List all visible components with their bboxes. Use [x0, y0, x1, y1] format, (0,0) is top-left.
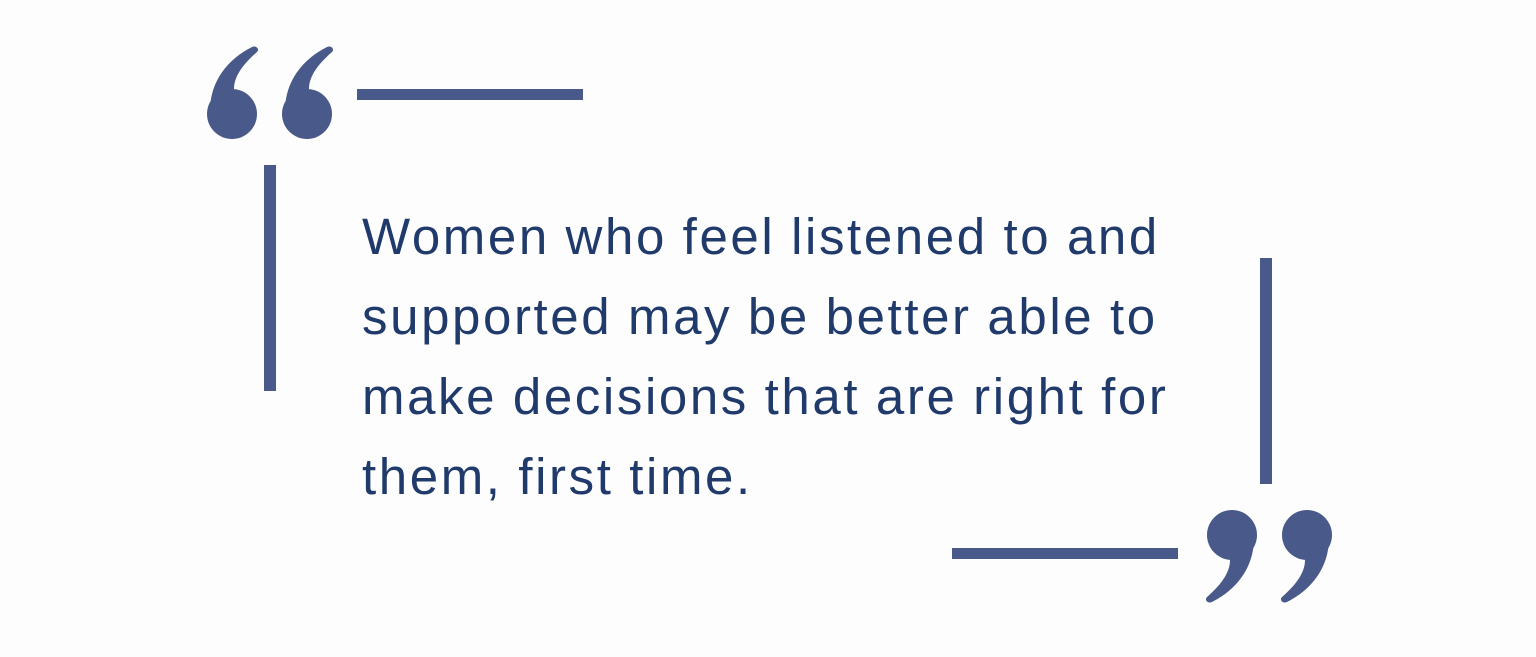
quote text: Women who feel listened to and — [362, 208, 1160, 265]
icon: opening quote — [207, 46, 333, 139]
left vertical bar — [264, 165, 276, 391]
quote text — [362, 208, 1168, 505]
bottom horizontal bar — [952, 548, 1178, 559]
top horizontal bar — [357, 89, 583, 100]
right vertical bar — [1260, 258, 1272, 484]
quote text: supported may be better able to — [362, 288, 1158, 345]
quote text: make decisions that are right for — [362, 368, 1168, 425]
quote text: them, first time. — [362, 448, 753, 505]
icon: closing quote — [1206, 510, 1332, 602]
